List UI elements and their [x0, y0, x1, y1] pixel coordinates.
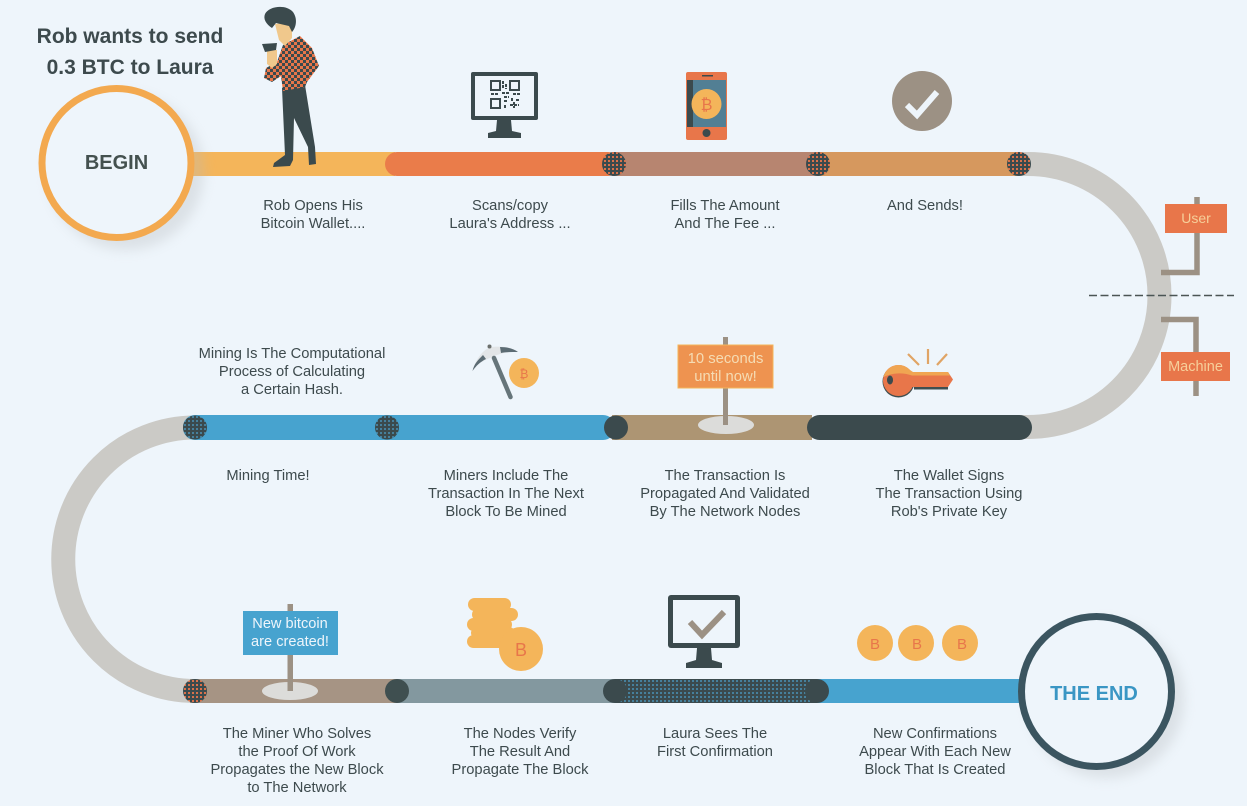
step labels row 2: Miners Include The [444, 468, 568, 484]
sign: new bitcoin: are created! [251, 634, 329, 650]
curved track: mining to block [63, 428, 200, 691]
sign: machine [1161, 320, 1230, 396]
step labels row 3: Laura Sees The [663, 726, 767, 742]
track row 3: block steps [183, 679, 1032, 703]
sign: 10 seconds: until now! [694, 369, 757, 385]
curved track: user to machine [1020, 164, 1160, 427]
end circle [1022, 616, 1184, 778]
icon: three coins: B [870, 636, 880, 653]
step labels row 3: First Confirmation [657, 744, 773, 760]
step labels row 2: The Transaction Using [876, 486, 1022, 502]
step labels row 2: By The Network Nodes [650, 504, 800, 520]
step labels row 3: The Nodes Verify [464, 726, 577, 742]
step labels row 3: Appear With Each New [859, 744, 1011, 760]
QR code [491, 81, 520, 109]
step labels row 2 [226, 468, 1022, 520]
step labels row 3: Block That Is Created [865, 762, 1005, 778]
sign: new bitcoin: New bitcoin [252, 616, 328, 632]
sign: new bitcoin [243, 604, 338, 700]
icon: phone with bitcoin: ₿ [701, 96, 712, 114]
track row 2: machine steps [183, 415, 1032, 440]
step labels row 1: Rob Opens His [263, 198, 363, 214]
step labels row 2: Propagated And Validated [640, 486, 810, 502]
icon: coin stack: B [515, 640, 527, 660]
icon: three coins [857, 625, 978, 661]
step labels row 2: The Wallet Signs [894, 468, 1004, 484]
icon: pickaxe and coin [472, 344, 539, 397]
step labels row 3: New Confirmations [873, 726, 997, 742]
track row 1: user steps [190, 152, 1031, 176]
step labels row 3 [210, 726, 1011, 796]
step labels row 1 [261, 198, 963, 232]
icon: check circle [892, 71, 952, 131]
step labels row 1: And The Fee ... [675, 216, 775, 232]
title: Rob wants to send [37, 25, 223, 48]
end circle: THE END [1050, 683, 1138, 705]
step labels row 3: the Proof Of Work [238, 744, 356, 760]
step labels row 1: Fills The Amount [670, 198, 780, 214]
icon: private key [882, 349, 953, 398]
icon: three coins: B [912, 636, 922, 653]
step text: mining definition: a Certain Hash. [241, 382, 343, 398]
divider: user / machine [1089, 294, 1234, 296]
step labels row 2: Transaction In The Next [428, 486, 584, 502]
step labels row 2: Block To Be Mined [445, 504, 567, 520]
sign: 10 seconds: 10 seconds [688, 351, 763, 367]
icon: man with phone [262, 7, 319, 167]
step labels row 2: The Transaction Is [665, 468, 785, 484]
icon: phone with bitcoin [686, 72, 727, 140]
begin circle [42, 88, 204, 250]
step text: mining definition: Process of Calculating [219, 364, 365, 380]
step labels row 1: And Sends! [887, 198, 963, 214]
step labels row 3: The Miner Who Solves [223, 726, 371, 742]
step labels row 3: Propagates the New Block [210, 762, 384, 778]
step text: mining definition: Mining Is The Computational [199, 346, 385, 362]
icon: coin stack [467, 598, 543, 671]
sign: 10 seconds [678, 337, 773, 434]
icon: QR monitor [471, 72, 538, 138]
icon: three coins: B [957, 636, 967, 653]
step labels row 1: Laura's Address ... [449, 216, 571, 232]
sign: user [1161, 197, 1227, 272]
icon: confirmation monitor [668, 595, 740, 668]
step labels row 1: Bitcoin Wallet.... [261, 216, 365, 232]
sign: user: User [1181, 210, 1211, 226]
step labels row 3: Propagate The Block [452, 762, 589, 778]
step labels row 3: The Result And [470, 744, 570, 760]
title: 0.3 BTC to Laura [47, 56, 214, 79]
sign: machine: Machine [1168, 359, 1223, 375]
step labels row 2: Mining Time! [226, 468, 310, 484]
begin circle: BEGIN [85, 152, 148, 174]
step labels row 2: Rob's Private Key [891, 504, 1008, 520]
step labels row 1: Scans/copy [472, 198, 549, 214]
step labels row 3: to The Network [247, 780, 347, 796]
icon: pickaxe and coin: ₿ [520, 367, 529, 381]
